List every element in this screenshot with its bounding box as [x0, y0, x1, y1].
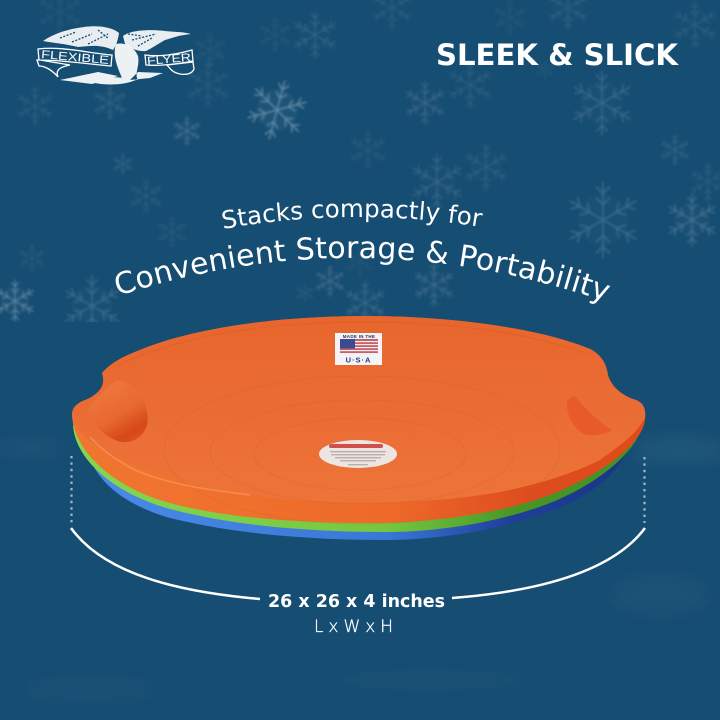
floor reflections: [0, 438, 720, 700]
label caption: MADE IN THE: [343, 334, 375, 339]
orange sled body: [72, 316, 645, 523]
dimension arc left: [71, 528, 260, 599]
right banner: [145, 50, 194, 74]
dimensions value: 26 x 26 x 4 inches: [268, 592, 445, 612]
dimensions caption: L x W x H: [314, 617, 393, 637]
sled stack: [72, 316, 645, 540]
wing feather texture: [60, 30, 156, 46]
dimension arc right: [452, 528, 645, 598]
label USA text: U·S·A: [346, 356, 371, 364]
snowflake pattern: [0, 0, 720, 336]
center product sticker: [319, 440, 397, 468]
green sled: [73, 425, 642, 532]
title: SLEEK & SLICK: [436, 38, 680, 72]
blue sled: [85, 440, 630, 540]
right handle pocket: [567, 397, 612, 435]
eagle wings: [43, 26, 191, 51]
Made in the USA label: [335, 333, 382, 365]
inner lip: [118, 322, 590, 365]
logo: Flexible Flyer: [37, 26, 194, 84]
heading line one: Stacks compactly for: [222, 201, 483, 228]
eagle body and arrows: [60, 44, 163, 84]
bowl rings: [164, 376, 560, 524]
left banner: [37, 48, 112, 77]
curved heading: [116, 201, 610, 350]
heading line two: Convenient Storage & Portability: [116, 237, 610, 304]
dimension dotted guide right: [643, 457, 646, 523]
dimension dotted guide left: [70, 456, 73, 523]
rim highlight: [90, 437, 250, 495]
sled top surface: [72, 316, 645, 503]
logo wordmark right: FLYER: [147, 52, 191, 68]
logo wordmark left: FLEXIBLE: [41, 49, 110, 67]
left handle pocket: [87, 380, 148, 442]
